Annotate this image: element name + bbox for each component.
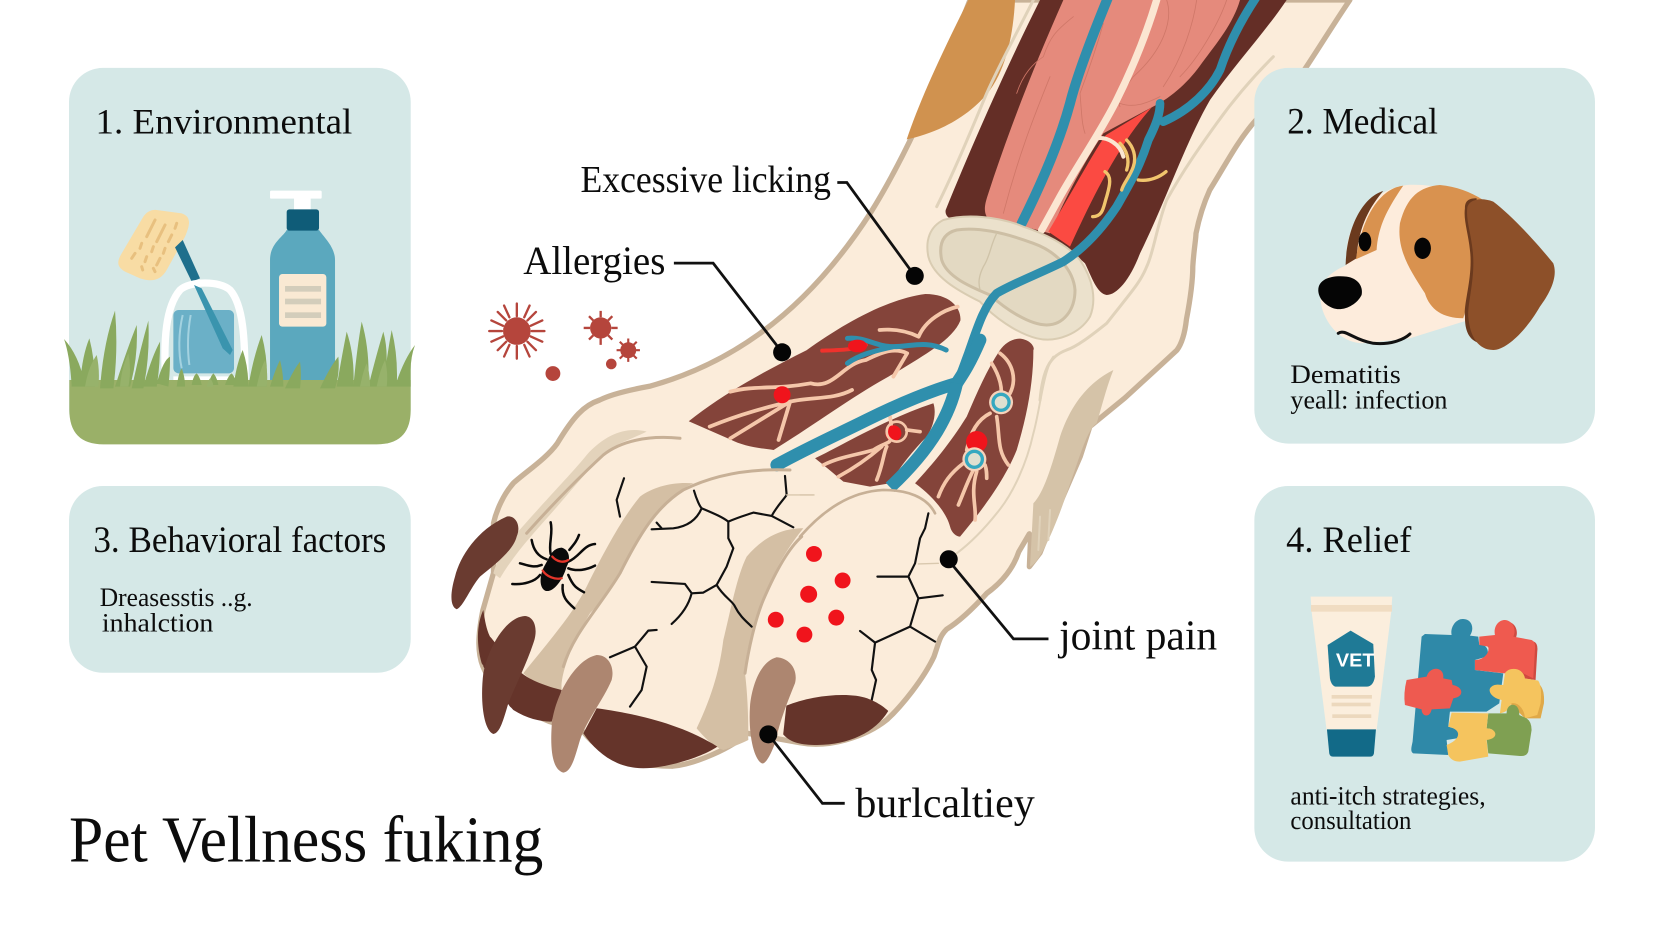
claw 3 [551, 655, 613, 773]
muscle fibres [1003, 0, 1227, 213]
icon: dog head [1318, 185, 1555, 350]
pink muscle [985, 0, 1240, 233]
tendon [1042, 0, 1157, 230]
title: Pet Vellness fuking [69, 804, 543, 877]
skin cracks [610, 476, 793, 707]
callout: burlcaltiey: burlcaltiey [855, 780, 1035, 827]
icon: cup of water [165, 283, 245, 380]
toe 1 band [493, 430, 647, 578]
blue ring markers [962, 390, 1013, 471]
callout: joint pain [940, 550, 1217, 659]
card background [1254, 68, 1595, 444]
upper leg anatomy [907, 0, 1287, 400]
icon: grass lighter blades [85, 353, 387, 387]
body text [1290, 359, 1447, 415]
allergen dots [545, 359, 617, 381]
card background [1254, 486, 1595, 862]
tendon curve [1097, 138, 1123, 157]
body text: Dematitis [1290, 359, 1401, 389]
lower tissue, veins and nerves [777, 339, 1113, 700]
body text: yeall: infection [1290, 385, 1447, 415]
upper vein [1022, 0, 1108, 223]
pale crack stub [800, 495, 938, 564]
toxin dots [768, 546, 851, 643]
icon: sponge [118, 210, 189, 280]
upper tissue spots [774, 340, 867, 403]
toe 3 arc lower [745, 537, 802, 673]
large allergen [489, 303, 544, 359]
icon: vet cream tube: VET [1336, 650, 1375, 671]
toe 1 arc [527, 437, 680, 533]
card background [69, 486, 411, 673]
icon: shampoo bottle [270, 191, 335, 387]
callout: joint pain: joint pain [1057, 612, 1217, 659]
toe 2 arc [563, 470, 790, 667]
left pad [478, 610, 562, 722]
inflammation spots [885, 425, 901, 441]
toe 3 arc [800, 490, 935, 537]
icon: puzzle pieces [1404, 619, 1544, 762]
spur tan fold [1030, 370, 1113, 567]
icon: brush handle upper [175, 240, 200, 282]
artery [1048, 107, 1152, 247]
pocket: middle tissue [815, 403, 935, 487]
toes, claws and pads [451, 430, 813, 773]
orange fur patch [907, 0, 1015, 139]
claw 4 [750, 657, 796, 763]
toe 2 band [523, 483, 693, 690]
heading: 1. Environmental [96, 102, 352, 142]
nerve ring [887, 422, 907, 442]
callout: allergies: Allergies [523, 238, 665, 283]
illustration: paw anatomy [451, 0, 1350, 773]
central pad [583, 708, 717, 768]
yellow nerves [1093, 140, 1166, 217]
joint capsule [927, 217, 1093, 340]
tissue nerves [823, 353, 1013, 520]
small allergen [617, 339, 640, 362]
dark cracks on right toe [860, 513, 943, 700]
callout: excessive licking [581, 159, 924, 285]
pocket: upper tissue [689, 294, 960, 450]
pocket: right tissue [915, 339, 1034, 537]
medium allergen [584, 311, 618, 345]
callout: allergies [523, 238, 791, 361]
allergen particles [489, 303, 640, 381]
nerves and veins in upper tissue [710, 307, 958, 440]
icon: sponge, cup, bottle and grass [64, 191, 415, 444]
heading: 4. Relief [1286, 520, 1412, 561]
right vein [957, 0, 1257, 383]
heading: 2. Medical [1287, 102, 1438, 143]
card background [69, 68, 411, 444]
right pad [783, 695, 888, 745]
icon: grass blades [64, 311, 415, 388]
panel: 4 relief [1254, 486, 1595, 862]
claw 2 [482, 616, 536, 734]
callout: burlcaltiey [759, 725, 1035, 827]
tick [512, 522, 595, 608]
body text: consultation [1290, 805, 1411, 835]
main vein branch down [890, 383, 957, 487]
claw 1 [451, 516, 518, 609]
main vein branch left [777, 340, 980, 465]
body text: anti-itch strategies, [1290, 780, 1486, 810]
dark muscle cavity [946, 0, 1287, 295]
icon: brush handle lower [194, 285, 233, 355]
panel: 1 environmental [64, 68, 415, 444]
body text [100, 582, 253, 637]
panel: 3 behavioral factors [69, 486, 411, 673]
leg and paw silhouette [479, 0, 1350, 766]
inner skin lines [937, 0, 1273, 400]
body text [1290, 780, 1486, 835]
body text: inhalction [102, 607, 213, 637]
callout: excessive licking: Excessive licking [581, 159, 831, 201]
body text: Dreasesstis ..g. [100, 582, 253, 612]
icon: grass ground [69, 380, 411, 444]
icon: vet cream tube [1311, 597, 1392, 757]
spur fur lines and inner edge [957, 357, 1053, 553]
pale crack end [787, 493, 813, 497]
heading: 3. Behavioral factors [93, 520, 386, 561]
panel: 2 medical [1254, 68, 1595, 444]
toe 1 underside [483, 647, 562, 722]
toe 3 band [697, 528, 803, 750]
